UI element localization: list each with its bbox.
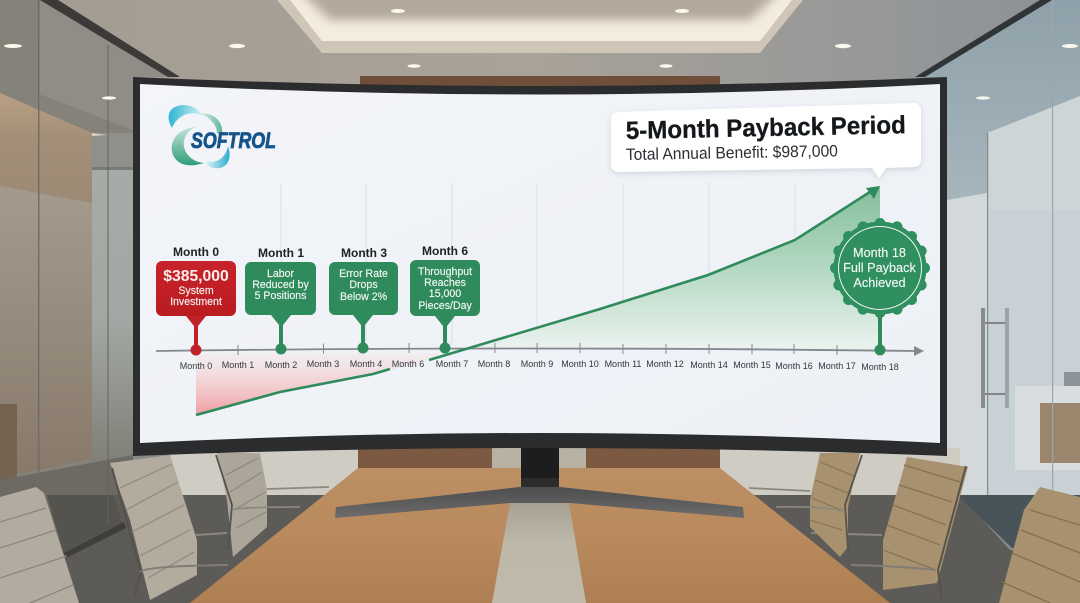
monitor screen <box>140 84 940 443</box>
timeline month labels: Month 7 <box>436 359 468 369</box>
timeline month labels: Month 16 <box>775 361 813 371</box>
timeline axis <box>156 343 924 356</box>
monitor bezel <box>133 77 947 456</box>
milestone: Month 6 throughput <box>410 244 480 354</box>
chair behind table <box>492 445 586 469</box>
badge: full payback achieved <box>830 218 930 356</box>
ceiling light cove <box>277 0 803 53</box>
back wall below monitor <box>170 448 960 495</box>
timeline month labels: Month 8 <box>478 359 510 369</box>
timeline month labels: Month 18 <box>861 362 899 372</box>
door handles <box>981 308 1009 408</box>
recessed ceiling lights <box>4 9 1078 100</box>
milestone: Month 3 error rate: Drops <box>349 279 378 291</box>
logo swirl <box>169 105 230 168</box>
logo wordmark: SOFTROL <box>191 128 276 153</box>
timeline month labels: Month 2 <box>265 360 297 370</box>
callout heading: 5-Month Payback Period <box>626 111 906 145</box>
arrow head <box>866 186 880 199</box>
milestone: Month 3 error rate: Month 3 <box>341 246 387 260</box>
timeline month labels: Month 12 <box>646 359 684 369</box>
milestone: Month 1 labor <box>245 246 316 354</box>
milestone: Month 0 investment: System <box>178 285 214 297</box>
milestone: Month 0 investment: Month 0 <box>173 245 219 259</box>
timeline month labels: Month 6 <box>392 359 424 369</box>
milestone: Month 6 throughput: Month 6 <box>422 244 468 258</box>
benefit area (green) <box>430 186 880 359</box>
milestone: Month 1 labor: 5 Positions <box>255 290 306 302</box>
timeline month labels: Month 11 <box>605 359 641 369</box>
timeline month labels: Month 4 <box>350 359 382 369</box>
milestone: Month 0 investment: Investment <box>170 296 222 308</box>
wood panel behind monitor <box>360 76 720 90</box>
timeline month labels: Month 9 <box>521 359 553 369</box>
vertical grid lines <box>281 183 795 345</box>
milestone: Month 0 investment: $385,000 <box>163 268 229 285</box>
chairs right <box>749 453 1080 603</box>
timeline month labels: Month 1 <box>222 360 254 370</box>
right glass wall <box>915 0 1080 503</box>
wooden cabinet <box>358 447 720 469</box>
chairs left <box>0 453 329 603</box>
timeline month labels: Month 17 <box>818 361 856 371</box>
milestone: Month 1 labor: Month 1 <box>258 246 304 260</box>
ceiling <box>0 0 1080 100</box>
cost area (red) <box>196 353 450 415</box>
conference table <box>190 468 890 603</box>
timeline month labels: Month 3 <box>307 359 339 369</box>
badge: full payback achieved: Full Payback <box>843 261 916 275</box>
left glass wall <box>0 0 180 555</box>
badge: full payback achieved: Achieved <box>853 276 906 290</box>
milestone: Month 6 throughput: Reaches <box>424 277 466 289</box>
milestone: Month 3 error rate: Error Rate <box>339 268 388 280</box>
milestone: Month 3 error rate <box>329 246 398 354</box>
milestone: Month 6 throughput: 15,000 <box>429 288 461 300</box>
timeline month labels: Month 0 <box>180 361 212 371</box>
callout: payback period <box>611 103 921 178</box>
payback trend line <box>196 186 880 415</box>
callout subheading: Total Annual Benefit: $987,000 <box>626 142 838 164</box>
milestone: Month 1 labor: Reduced by <box>252 279 309 291</box>
logo: Softrol <box>169 105 276 168</box>
timeline month labels: Month 15 <box>733 360 771 370</box>
milestone: Month 0 investment <box>156 245 236 356</box>
milestone: Month 6 throughput: Pieces/Day <box>418 300 472 312</box>
timeline month labels: Month 10 <box>561 359 599 369</box>
milestone: Month 3 error rate: Below 2% <box>340 291 388 303</box>
badge: full payback achieved: Month 18 <box>853 246 906 260</box>
floor <box>0 495 1080 603</box>
timeline month labels <box>180 359 899 372</box>
timeline month labels: Month 14 <box>690 360 728 370</box>
milestone: Month 1 labor: Labor <box>267 268 295 280</box>
monitor stand <box>335 446 744 518</box>
table center strip <box>492 503 586 603</box>
milestone: Month 6 throughput: Throughput <box>418 266 472 278</box>
